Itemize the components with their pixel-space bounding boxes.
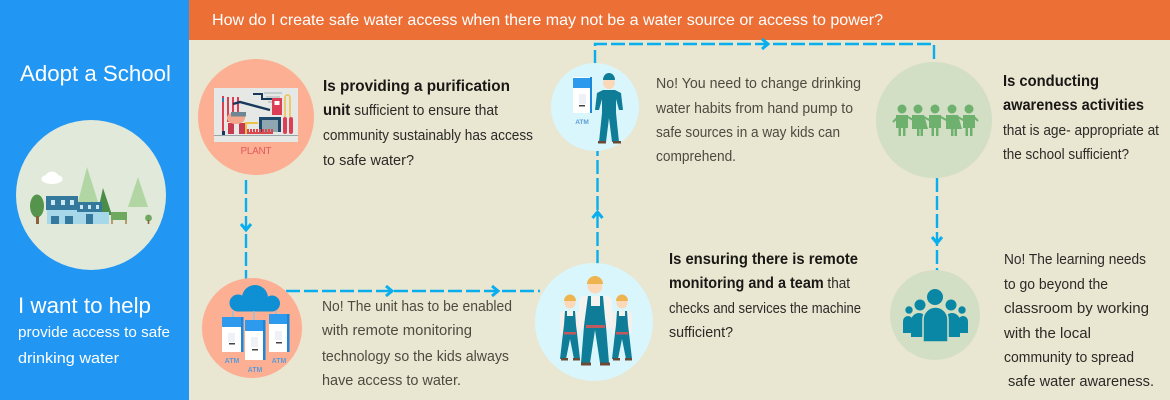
text: awareness question: the school sufficient? [1003,146,1129,163]
worker right [612,294,632,360]
icon: plant [198,59,314,175]
text: remote monitoring answer [321,298,512,389]
text: community answer: to go beyond the [1004,276,1108,293]
arrow: cloud ATMs to workers [286,286,540,296]
text: community answer [1003,251,1154,390]
text: monitoring question: checks and services the machine [669,300,861,317]
text: community answer: No! The learning needs [1004,251,1146,268]
text: awareness question: that is age- appropriate at [1003,122,1160,139]
text: awareness question: awareness activities [1003,97,1144,114]
ATM unit right [269,314,290,352]
text: awareness question: Is conducting [1003,73,1099,90]
icon: ATM with technician [551,63,639,151]
icon: service team [535,263,653,381]
ATM unit centre [245,320,266,360]
ATM unit left [222,317,244,352]
left sidebar panel [0,0,189,400]
text: monitoring question: sufficient? [669,324,733,341]
text: habits answer [655,75,861,165]
worker left [560,294,580,360]
text: habits answer: water habits from hand pump to [655,100,853,117]
icon: community group [890,270,980,360]
sidebar description [18,324,170,367]
text: remote monitoring answer: technology so the kids always [322,348,509,365]
text: monitoring question [669,251,861,341]
icon: ATM with technician: ATM [575,119,589,126]
text: purification question [323,78,533,169]
text: monitoring question: monitoring and a team that [669,275,851,292]
icon: children holding hands [876,62,992,178]
worker centre [579,276,612,366]
text: habits answer: safe sources in a way kids can [656,124,840,141]
sidebar subheading: I want to help [18,293,151,318]
text: community answer: safe water awareness. [1008,373,1154,390]
arrow: awareness to community [932,178,942,271]
text: monitoring question: Is ensuring there is remote [669,251,858,268]
icon: cloud connected ATMs [202,278,302,378]
text: habits answer: No! You need to change drinking [656,75,861,92]
text: remote monitoring answer: have access to water. [322,372,461,389]
text: purification question: unit sufficient to ensure that [323,102,499,119]
header banner [189,0,1170,40]
text: purification question: Is providing a purification [323,78,510,95]
header banner: How do I create safe water access when there may not be a water source or access to power? [212,12,883,29]
text: remote monitoring answer: with remote monitoring [321,322,472,339]
sidebar description: drinking water [18,350,119,367]
text: community answer: classroom by working [1004,300,1149,317]
sidebar description: provide access to safe [18,324,170,341]
arrow: ATM technician to awareness [595,39,934,64]
text: community answer: community to spread [1004,349,1134,366]
icon: cloud connected ATMs: ATM [248,367,262,374]
icon: cloud connected ATMs: ATM [272,358,286,365]
icon: cloud connected ATMs: ATM [225,358,239,365]
icon: plant: PLANT [240,146,272,157]
text: community answer: with the local [1003,325,1091,342]
arrow: workers up to ATM technician [592,151,602,264]
text: remote monitoring answer: No! The unit has to be enabled [322,298,512,315]
arrow: plant to cloud ATMs [241,180,251,279]
text: purification question: to safe water? [323,152,414,169]
text: habits answer: comprehend. [656,148,736,165]
sidebar title: Adopt a School [20,61,171,86]
text: awareness question [1003,73,1160,163]
text: purification question: community sustainably has access [323,127,533,144]
icon: school scene [16,120,166,270]
